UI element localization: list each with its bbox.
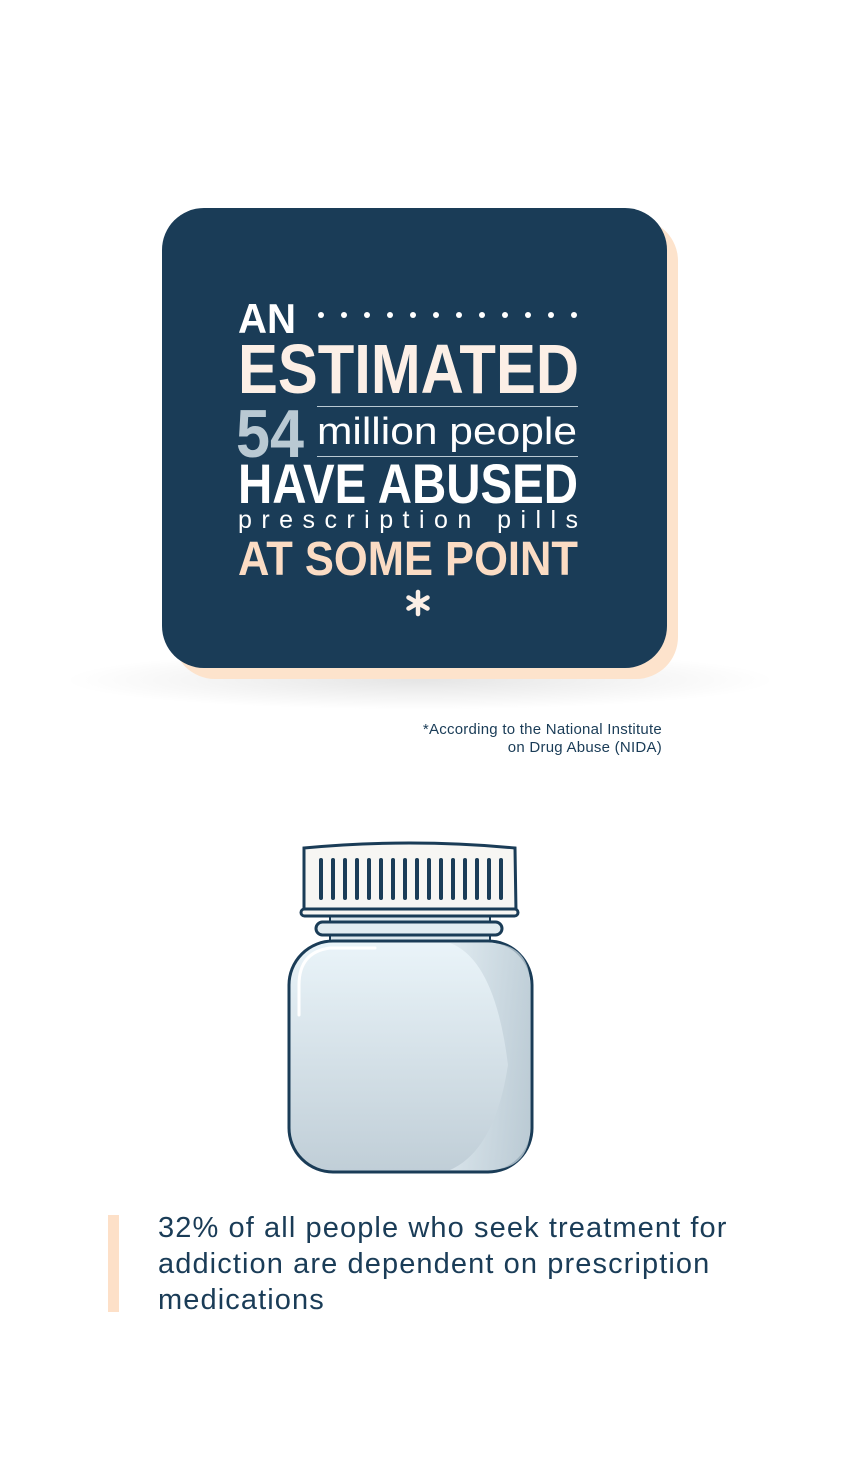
number 54: 54 xyxy=(236,396,304,472)
footnote xyxy=(423,721,662,756)
main stat card xyxy=(162,208,667,668)
footnote: on Drug Abuse (NIDA) xyxy=(508,739,662,756)
text: 32% statistic: addiction are dependent on prescription xyxy=(158,1248,710,1280)
footnote: *According to the National Institute xyxy=(423,721,662,738)
heading: ESTIMATED: ESTIMATED xyxy=(238,330,579,408)
dotted line xyxy=(318,312,577,318)
card back offset peach xyxy=(173,219,678,679)
accent bar xyxy=(108,1215,119,1312)
card shadow glow xyxy=(60,650,780,710)
text: million people: million people xyxy=(317,411,577,453)
heading: HAVE ABUSED: HAVE ABUSED xyxy=(238,452,578,515)
asterisk xyxy=(408,592,428,614)
heading: AT SOME POINT: AT SOME POINT xyxy=(238,533,578,586)
text: 32% statistic xyxy=(158,1212,728,1316)
text: 32% statistic: 32% of all people who seek treatment for xyxy=(158,1212,728,1244)
heading: AN: AN xyxy=(238,295,296,342)
icon: pill jar xyxy=(288,842,534,1174)
text: prescription pills: prescription pills xyxy=(238,506,578,534)
text: 32% statistic: medications xyxy=(158,1284,325,1316)
